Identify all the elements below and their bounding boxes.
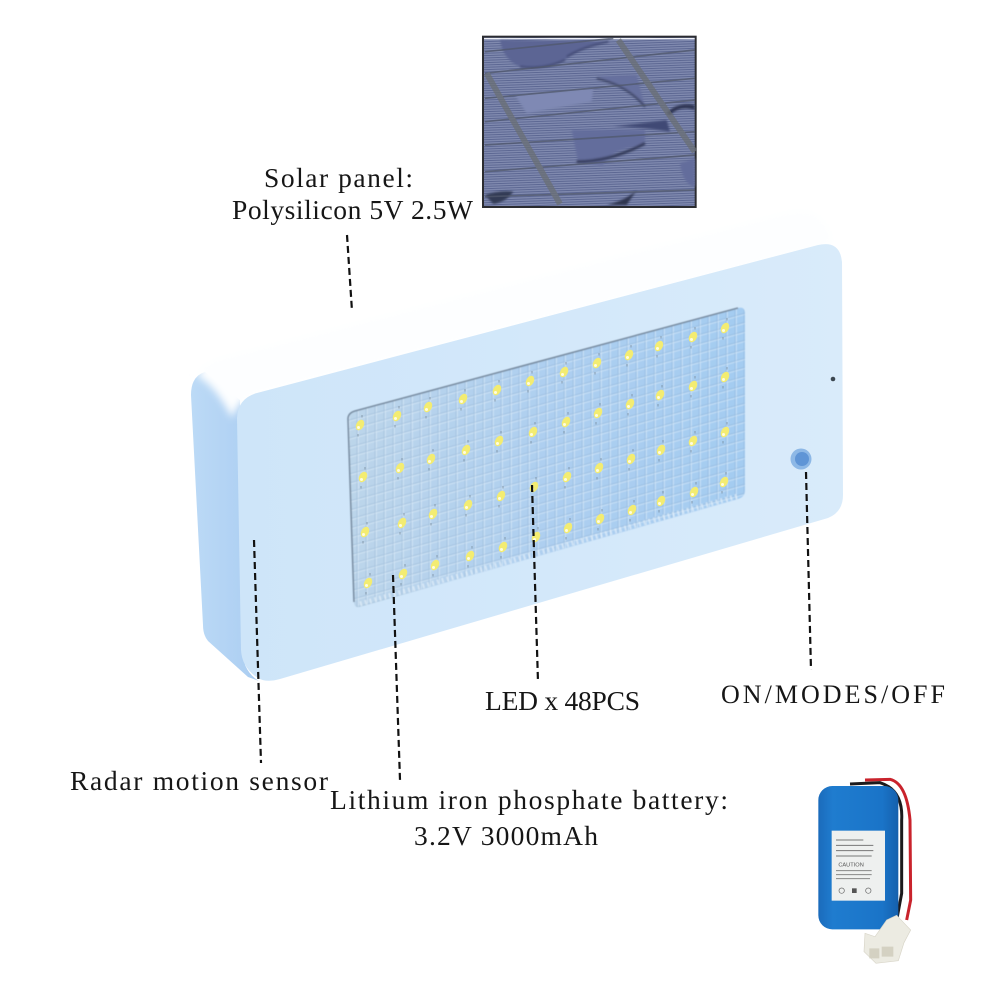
housing left side	[191, 372, 259, 681]
housing front face	[237, 244, 843, 681]
leader: solar panel	[347, 235, 352, 311]
housing top face	[197, 211, 832, 418]
battery cell	[818, 786, 898, 929]
label: battery	[330, 784, 728, 851]
LED row 4	[362, 472, 730, 594]
label: solar panel	[232, 162, 473, 225]
indicator hole	[831, 377, 835, 381]
leader: battery	[393, 575, 400, 780]
power button	[790, 448, 812, 470]
wires	[850, 779, 911, 920]
battery label: CAUTION	[838, 863, 864, 869]
label: LED count: LED x 48PCS	[485, 685, 640, 716]
LED row 2	[357, 367, 731, 488]
leader: radar sensor	[254, 540, 261, 763]
label: battery: Lithium iron phosphate battery:	[330, 784, 728, 815]
leader: LED	[532, 485, 538, 682]
LED row 1	[354, 318, 731, 436]
label: solar panel: Solar panel:	[264, 162, 413, 193]
label: button: ON/MODES/OFF	[721, 680, 945, 709]
LED window	[348, 308, 745, 607]
label: battery: 3.2V 3000mAh	[414, 820, 598, 851]
dashed leader lines	[254, 235, 811, 780]
label: solar panel: Polysilicon 5V 2.5W	[232, 194, 473, 225]
label: radar sensor: Radar motion sensor	[70, 765, 328, 796]
LED row 3	[359, 422, 731, 544]
connector	[864, 915, 911, 963]
battery photo	[818, 779, 911, 963]
solar panel photo	[483, 37, 696, 207]
battery label	[832, 831, 885, 901]
lamp housing	[191, 211, 843, 681]
water patches	[485, 40, 695, 205]
cell grid lines	[485, 38, 695, 204]
leader: button	[806, 472, 811, 670]
